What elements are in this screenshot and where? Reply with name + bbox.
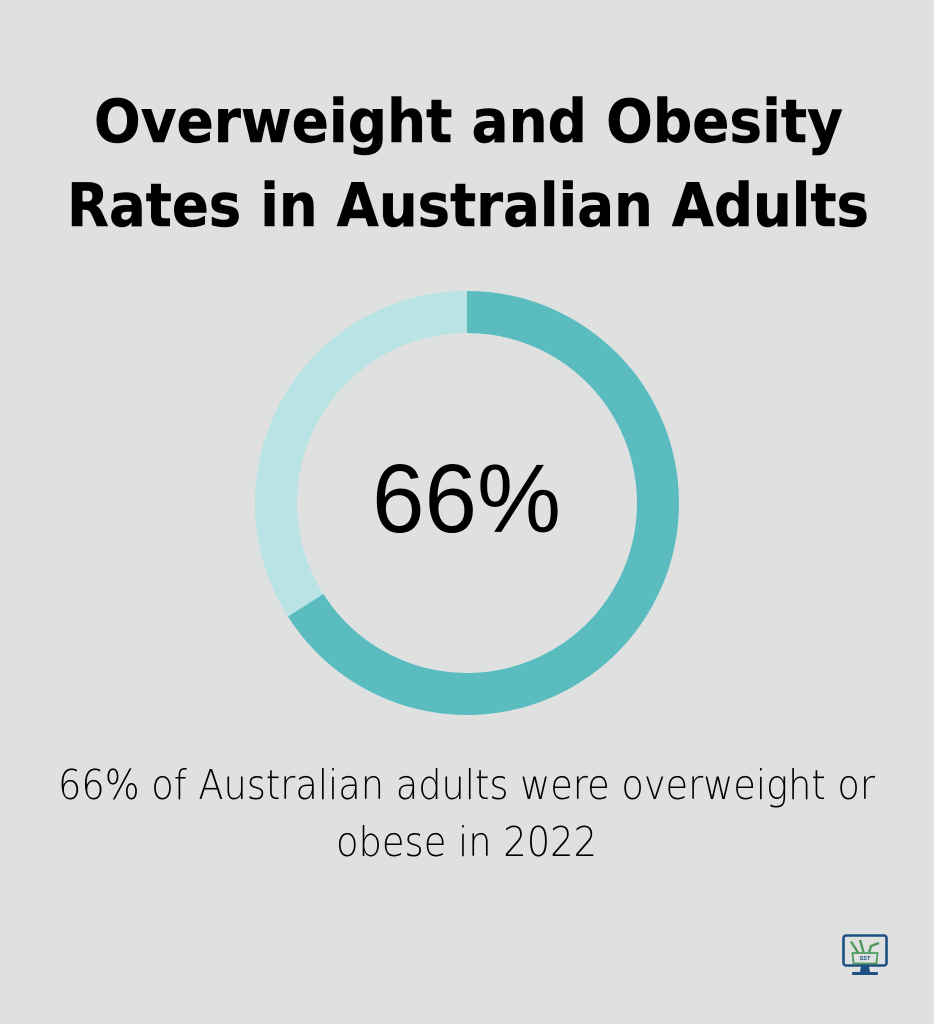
- title: [67, 87, 869, 241]
- caption: obese in 2022: [336, 818, 597, 866]
- center value: 66%: [372, 444, 561, 553]
- title: Rates in Australian Adults: [67, 171, 869, 241]
- title: Overweight and Obesity: [94, 87, 843, 157]
- caption: [58, 761, 875, 866]
- 66% share arc: [306, 312, 658, 694]
- remaining share ring: [276, 312, 658, 694]
- icon: monitor with toolbox logo: SST: [860, 956, 871, 962]
- donut chart: 66%: [276, 312, 658, 694]
- icon: monitor with toolbox logo: [844, 936, 886, 975]
